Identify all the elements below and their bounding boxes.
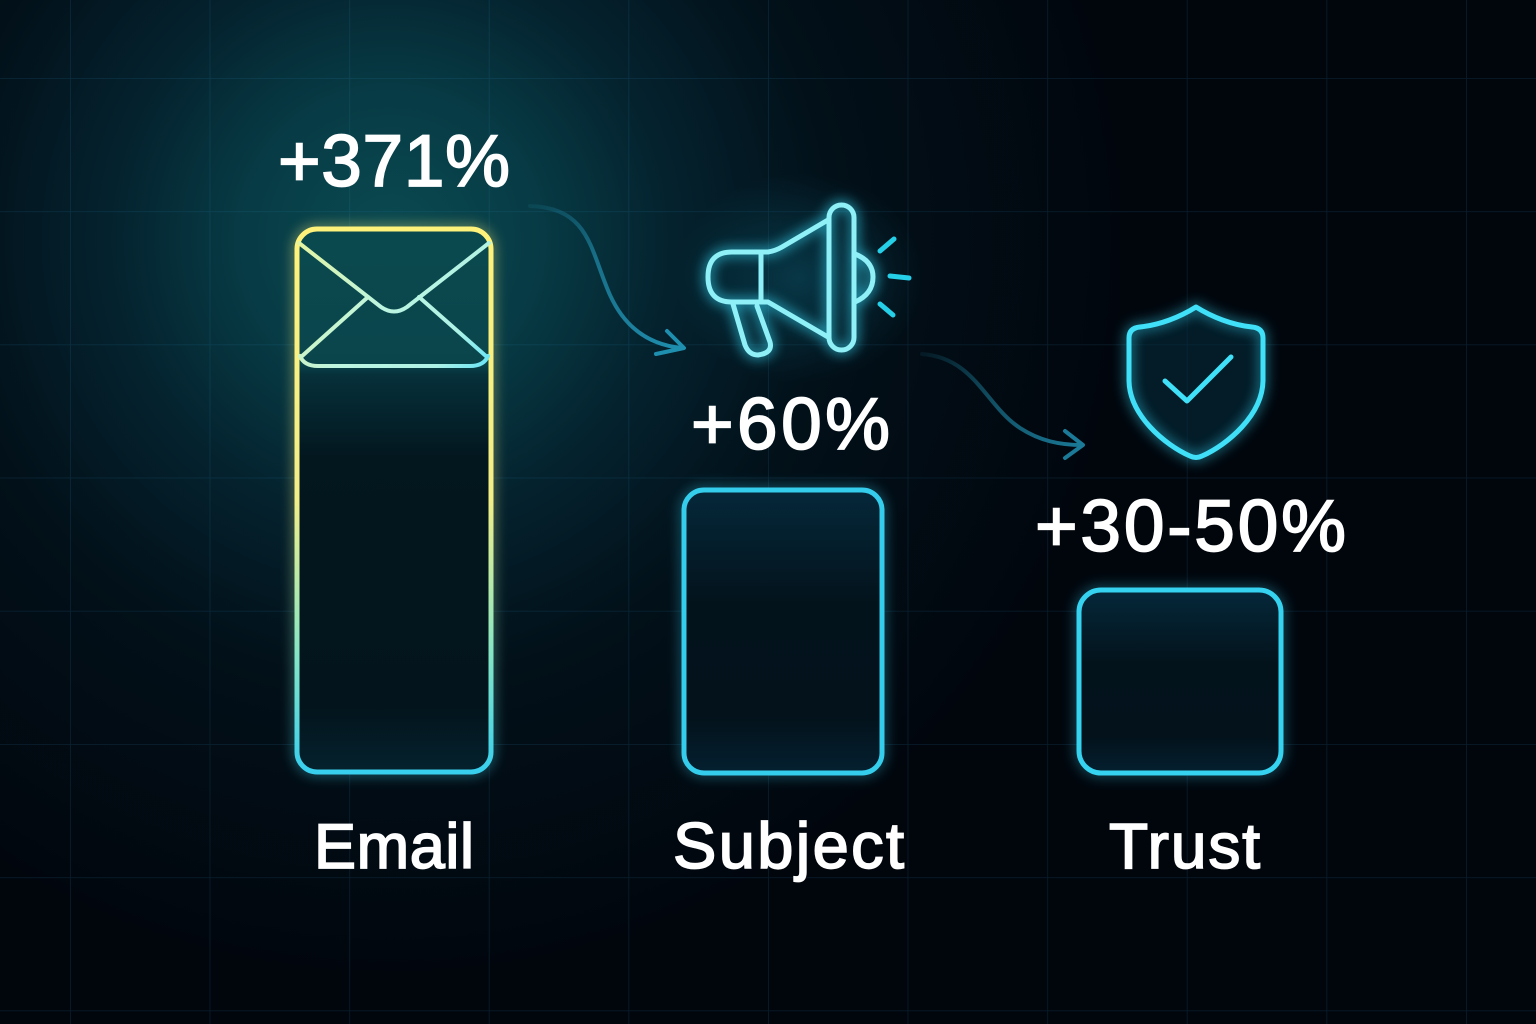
value: +30-50%: +30-50% bbox=[1035, 486, 1346, 567]
panel: Subject bar bbox=[684, 490, 882, 773]
panel: Trust bar bbox=[1079, 590, 1281, 773]
label: Trust: Trust bbox=[1109, 810, 1260, 882]
value: +60%: +60% bbox=[691, 384, 890, 465]
icon: shield with check bbox=[1129, 307, 1263, 458]
arrow: Email to Subject bbox=[530, 206, 684, 354]
label: Subject: Subject bbox=[673, 809, 904, 882]
label: Email: Email bbox=[314, 812, 474, 882]
arrow: Subject to Trust bbox=[922, 354, 1083, 458]
value: +371%: +371% bbox=[278, 121, 510, 202]
icon: envelope bbox=[299, 243, 489, 366]
icon: megaphone bbox=[675, 173, 925, 383]
panel: Email bar bbox=[297, 229, 491, 772]
